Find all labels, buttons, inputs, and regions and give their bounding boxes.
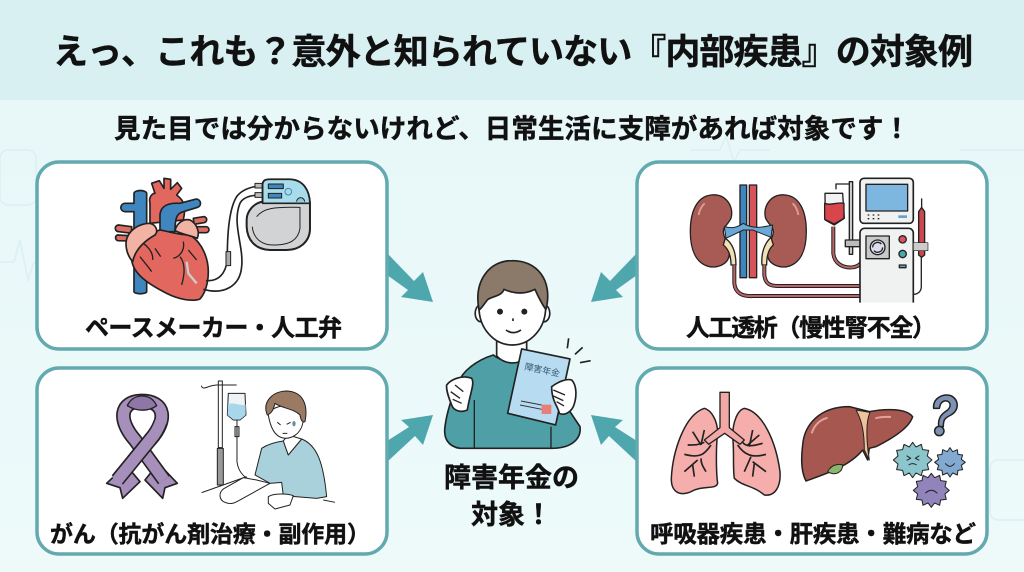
person with pension book: 障害年金 xyxy=(524,361,561,379)
hair xyxy=(478,261,548,310)
ears xyxy=(475,305,550,322)
person with pension book xyxy=(444,261,591,530)
arrows xyxy=(387,253,637,462)
icon: ribbon and IV patient xyxy=(107,381,335,509)
hand xyxy=(552,380,576,414)
panel: artificial dialysis xyxy=(637,162,987,349)
neck xyxy=(497,340,527,363)
panel: respiratory, liver, rare diseases xyxy=(637,368,987,554)
subtitle: 見た目では分からないけれど、日常生活に支障があれば対象です！ xyxy=(114,114,910,144)
label: 人工透析（慢性腎不全） xyxy=(686,315,936,342)
panel: cancer xyxy=(37,368,387,554)
sparkle xyxy=(567,338,591,363)
icon: kidneys and dialysis machine xyxy=(690,178,928,303)
panel: pacemaker and artificial valve xyxy=(37,162,387,349)
label: ペースメーカー・人工弁 xyxy=(85,315,342,342)
label: 呼吸器疾患・肝疾患・難病など xyxy=(650,521,976,547)
icon: lungs, liver, germs xyxy=(671,392,965,507)
icon: heart and pacemaker xyxy=(115,178,310,300)
face xyxy=(479,270,546,345)
shirt xyxy=(445,354,580,448)
title: えっ、これも？意外と知られていない『内部疾患』の対象例 xyxy=(53,33,973,72)
fist xyxy=(447,377,473,411)
header band xyxy=(0,0,1024,100)
center label line 2: 対象！ xyxy=(471,500,552,530)
ribbon tail ends xyxy=(107,463,177,498)
center label: 障害年金の xyxy=(444,463,579,493)
pension book xyxy=(508,349,570,425)
label: がん（抗がん剤治療・副作用） xyxy=(50,521,370,547)
